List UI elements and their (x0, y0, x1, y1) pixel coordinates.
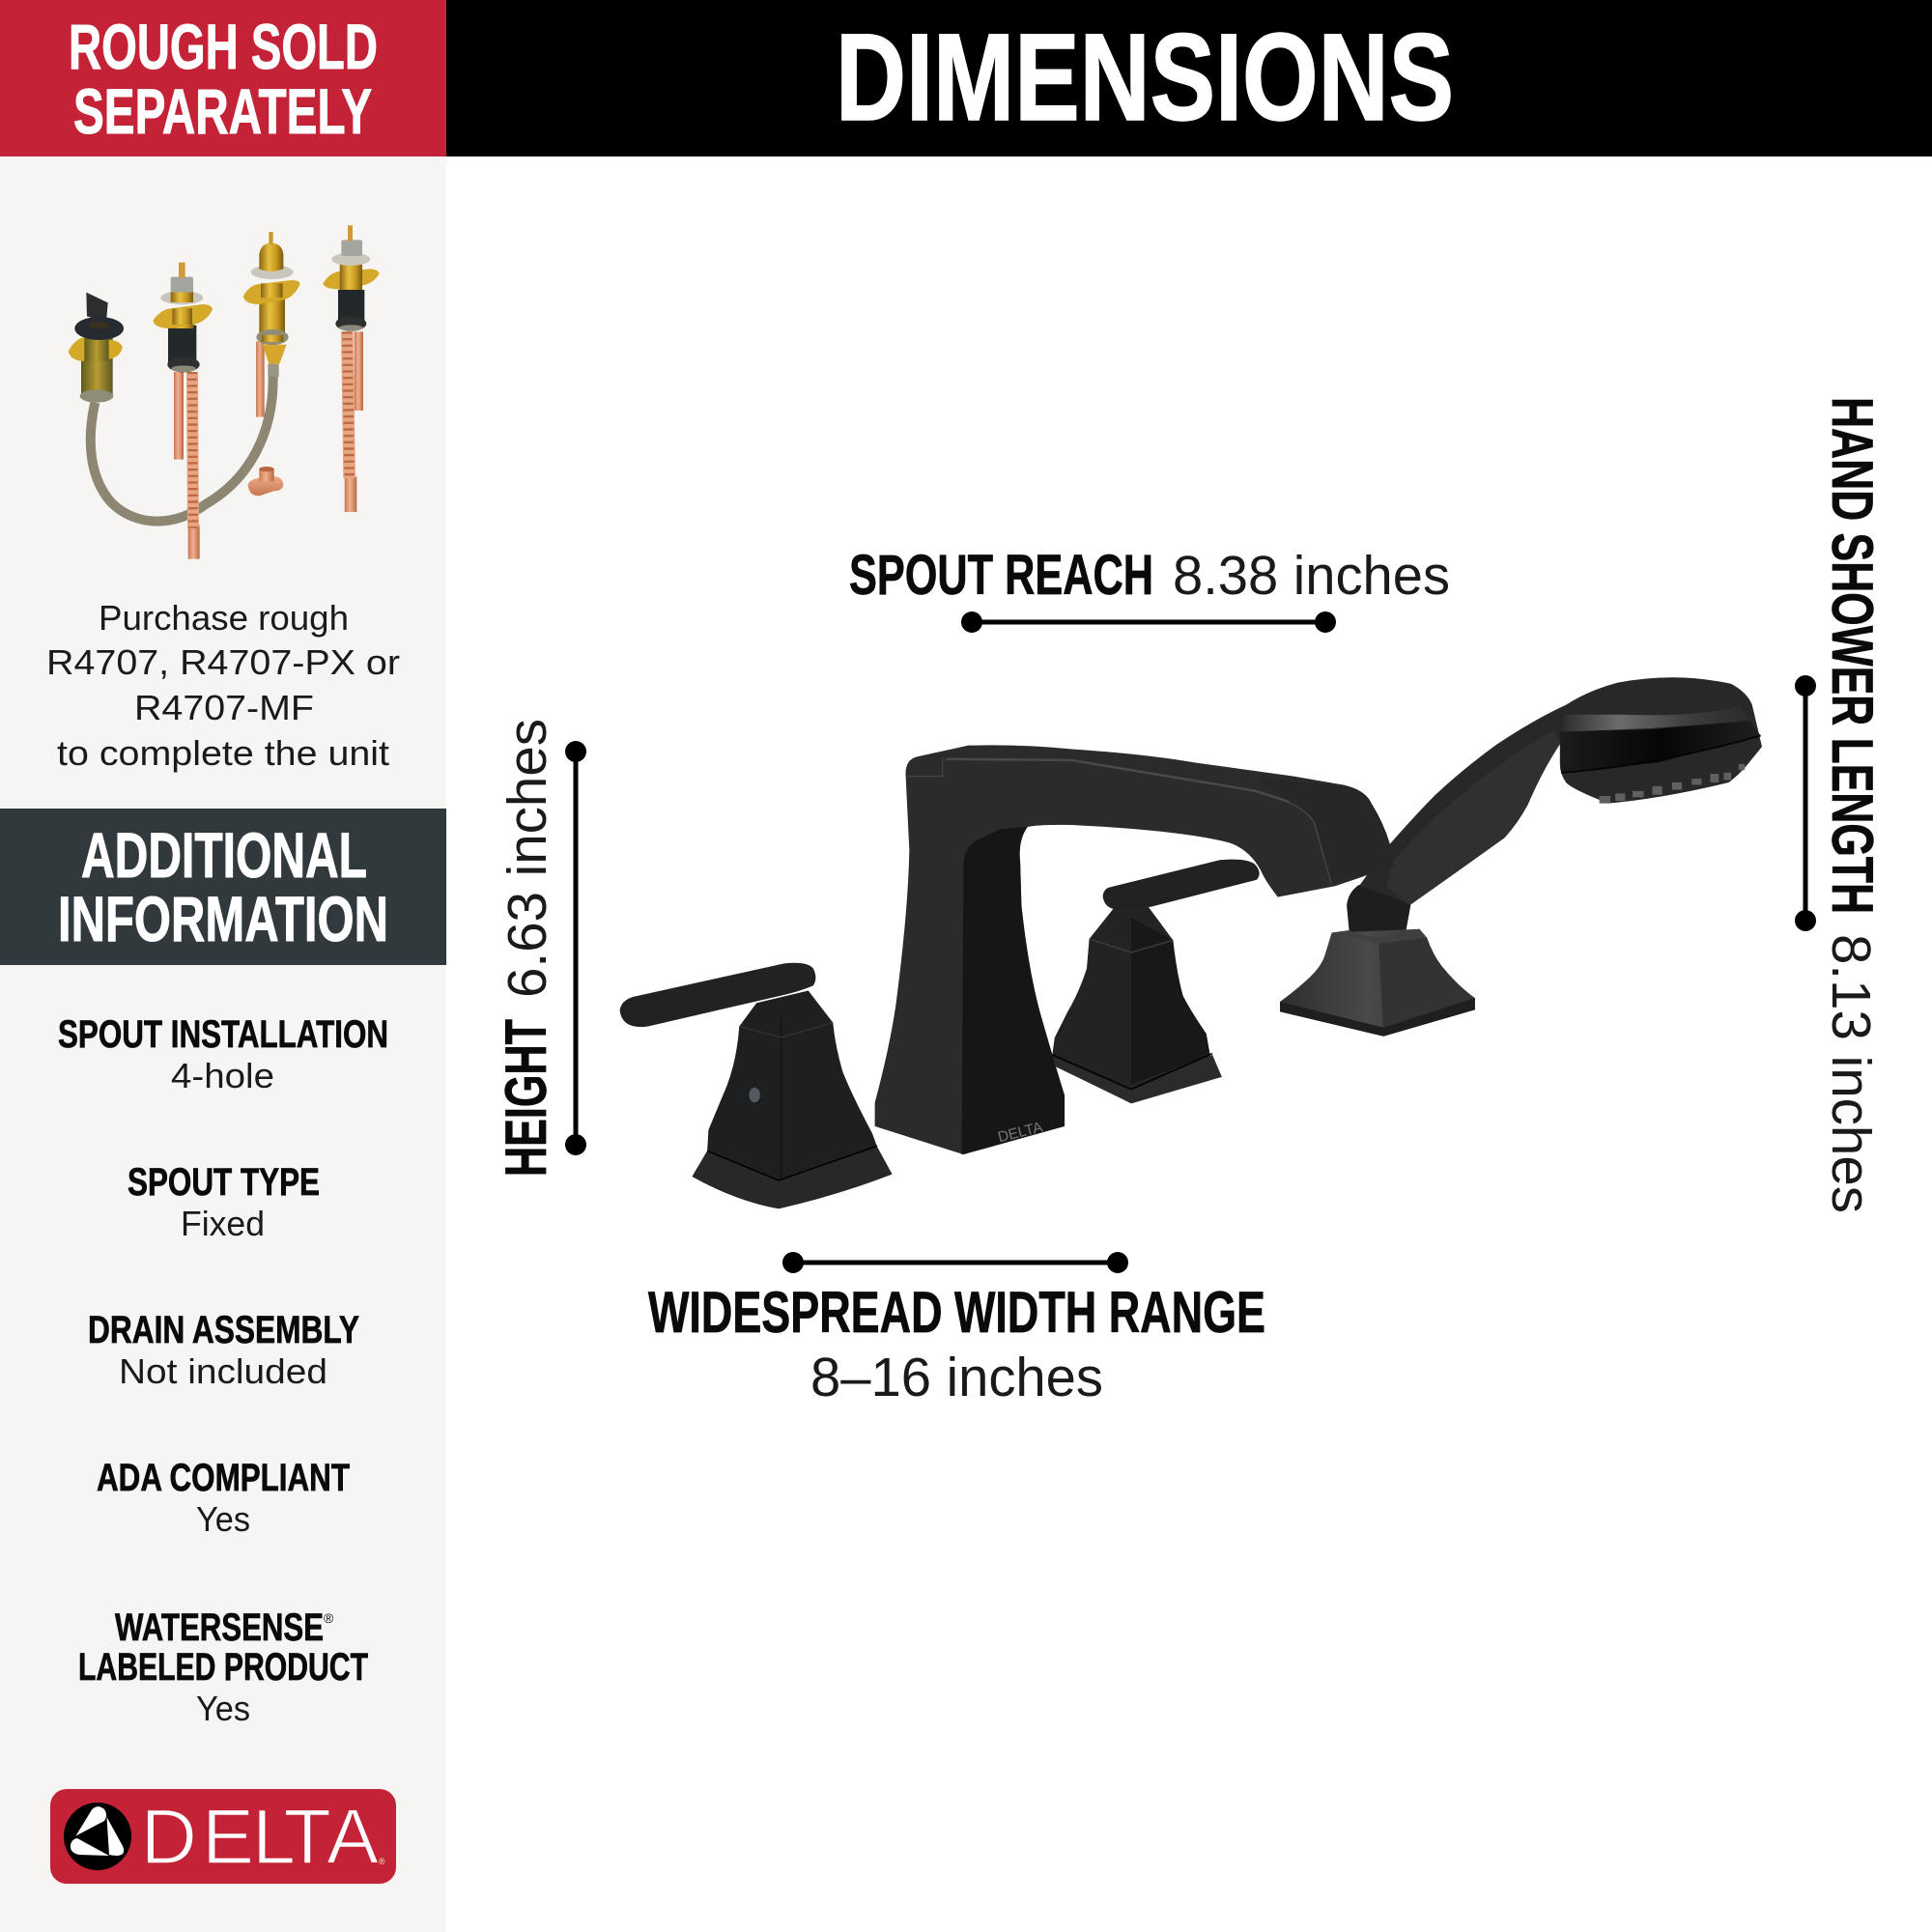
heading: additional information (0, 809, 446, 965)
image: rough-in valve set (69, 225, 380, 559)
valve 2: handle valve (153, 263, 213, 559)
dimension: height: 6.63 inches (497, 719, 558, 998)
info item: watersense labeled product: WATERSENSE (115, 1606, 324, 1649)
info item: ada compliant: ADA COMPLIANT (97, 1457, 350, 1499)
dimension: height (494, 719, 586, 1177)
info item: drain assembly: Not included (119, 1351, 327, 1391)
banner: rough sold separately (0, 0, 446, 156)
title banner: dimensions: DIMENSIONS (836, 9, 1454, 147)
copper tee fitting (248, 467, 283, 496)
info item: spout type: Fixed (181, 1204, 265, 1243)
spray nozzles (1600, 764, 1745, 804)
info item: spout installation (58, 1013, 388, 1095)
dimension: spout reach: SPOUT REACH (849, 544, 1153, 607)
dimension: hand shower length: 8.13 inches (1820, 934, 1882, 1213)
dimension: widespread width range: WIDESPREAD WIDTH RANGE (648, 1280, 1265, 1345)
dimension: widespread width range (648, 1252, 1265, 1408)
info item: watersense labeled product: Yes (196, 1689, 250, 1728)
logo: delta: ® (379, 1857, 385, 1866)
info item: watersense labeled product (78, 1606, 368, 1728)
panel: left sidebar background (0, 0, 446, 1932)
text block: purchase rough (46, 598, 400, 773)
flexible braided hose (91, 377, 273, 522)
text block: purchase rough: Purchase rough (99, 598, 349, 638)
logo: delta: DELTA (141, 1794, 379, 1881)
dimension: height: HEIGHT (494, 1019, 558, 1177)
product: bath faucet (620, 677, 1762, 1208)
valve 3: spout valve (243, 232, 300, 417)
logo mark on spout: DELTA (996, 1119, 1045, 1146)
banner: rough sold separately: SEPARATELY (73, 75, 372, 147)
text block: purchase rough: to complete the unit (57, 733, 389, 773)
heading: additional information: INFORMATION (58, 883, 388, 954)
info item: watersense labeled product: ® (324, 1610, 334, 1626)
dimension: hand shower length: HAND SHOWER LENGTH (1820, 397, 1885, 914)
banner: rough sold separately: ROUGH SOLD (69, 11, 378, 82)
info item: spout type: SPOUT TYPE (128, 1161, 320, 1204)
left handle (620, 963, 892, 1208)
dimension: spout reach: 8.38 inches (1173, 545, 1450, 607)
info item: spout installation: SPOUT INSTALLATION (58, 1013, 388, 1056)
right handle (1052, 860, 1260, 1103)
logo: delta (50, 1789, 396, 1884)
text block: purchase rough: R4707, R4707-PX or (46, 642, 400, 682)
info item: ada compliant (97, 1457, 350, 1539)
heading: additional information: ADDITIONAL (81, 819, 367, 891)
hand shower deck mount (1280, 885, 1475, 1037)
title banner: dimensions (446, 0, 1932, 156)
dimension: hand shower length (1795, 397, 1885, 1213)
info item: watersense labeled product: LABELED PRODUCT (78, 1646, 368, 1689)
valve 1: diverter (69, 293, 124, 403)
dimension: spout reach (849, 544, 1450, 633)
info item: drain assembly (88, 1309, 359, 1391)
text block: purchase rough: R4707-MF (134, 688, 314, 727)
valve 4: handle valve (323, 225, 380, 512)
centre spout (875, 745, 1394, 1154)
info item: drain assembly: DRAIN ASSEMBLY (88, 1309, 359, 1351)
info item: ada compliant: Yes (196, 1499, 250, 1539)
info item: spout type (128, 1161, 320, 1243)
hand shower (1359, 677, 1762, 904)
info item: spout installation: 4-hole (171, 1056, 274, 1095)
dimension: widespread width range: 8–16 inches (810, 1347, 1103, 1408)
